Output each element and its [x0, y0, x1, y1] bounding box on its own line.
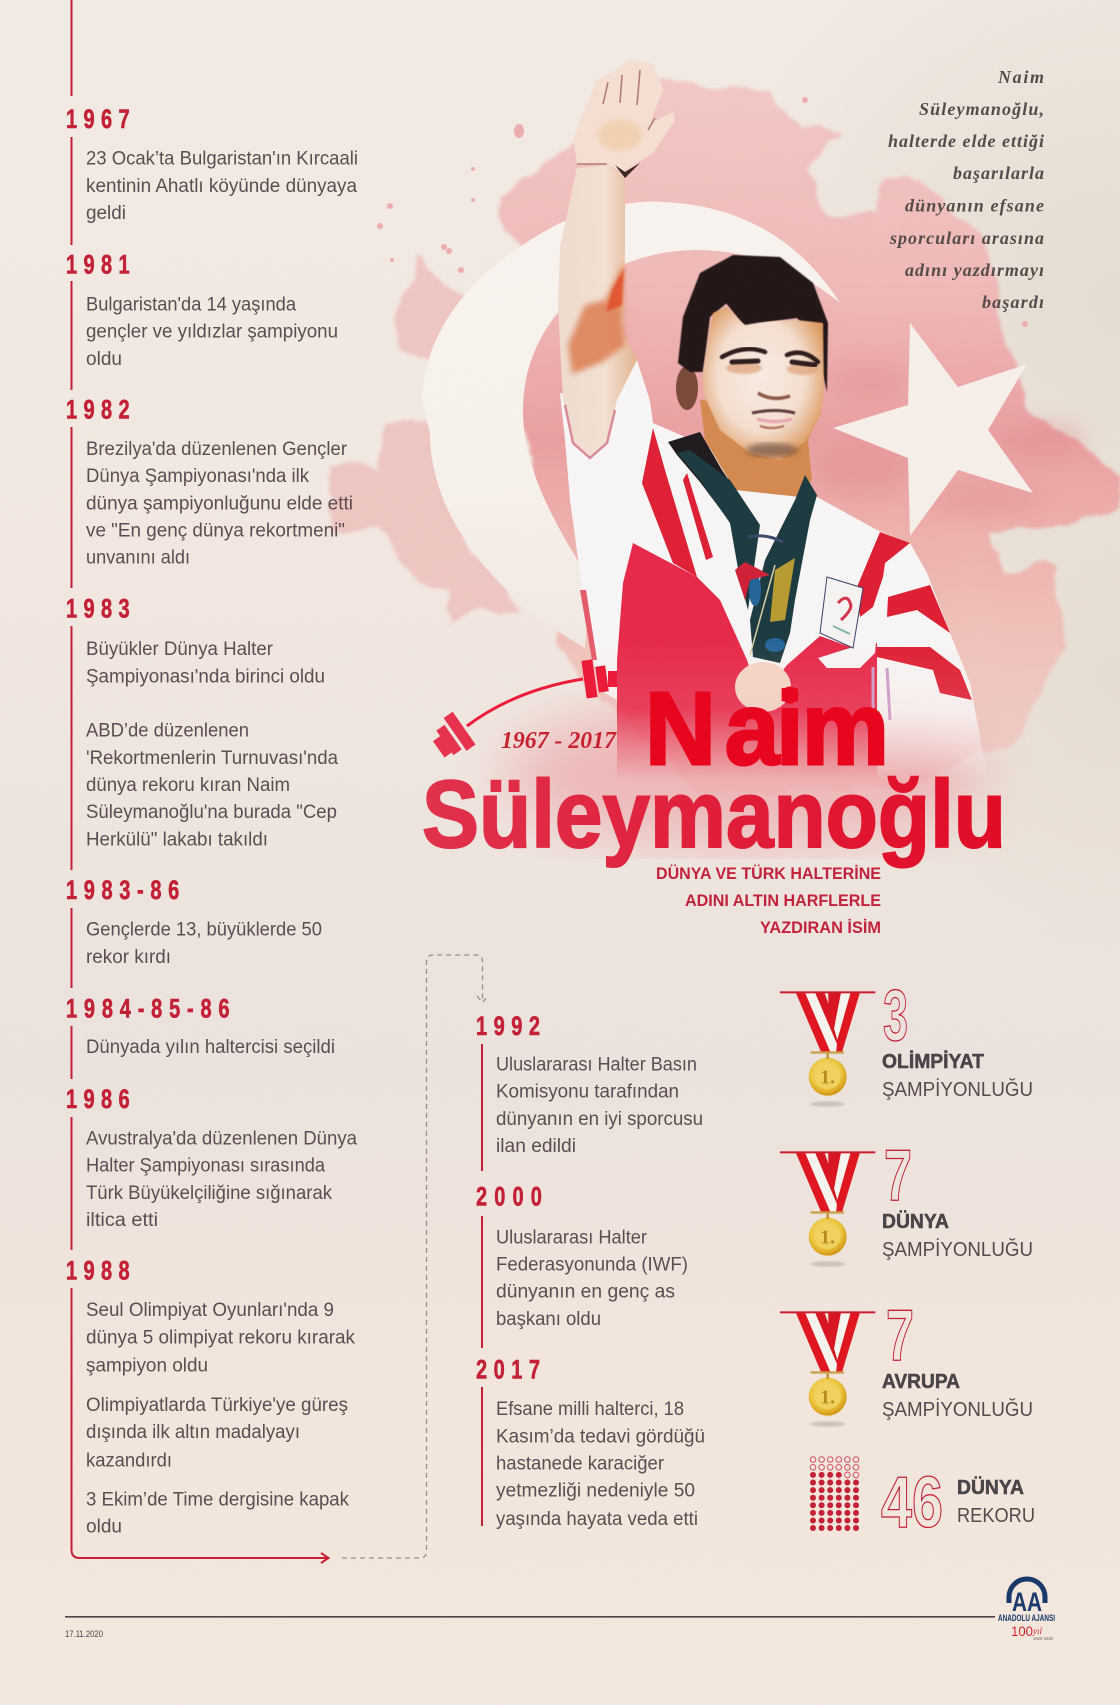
icon: medal: [780, 1151, 875, 1267]
entry: 1988: dışında ilk altın madalyayı: [86, 1422, 300, 1443]
sash stripes: [642, 428, 713, 577]
subtitle: ADINI ALTIN HARFLERLE: [685, 891, 881, 910]
entry: 1983: dünya rekoru kıran Naim: [86, 775, 290, 796]
entry: 1983-86: Gençlerde 13, büyüklerde 50: [86, 920, 322, 941]
entry: 1984-85-86: Dünyada yılın haltercisi seçildi: [86, 1037, 335, 1058]
entry: 1983: Büyükler Dünya Halter: [86, 639, 274, 660]
title: Süleymanoğlu: Süleymanoğlu: [422, 761, 1006, 868]
medal: [735, 662, 791, 712]
entry: 2017: Kasım’da tedavi gördüğü: [496, 1426, 705, 1447]
entry: 2000: Federasyonunda (IWF): [496, 1255, 688, 1276]
entry: 2017: yetmezliği nedeniyle 50: [496, 1481, 695, 1502]
stat: olympic: [780, 976, 1033, 1107]
entry: 1981: 1981: [66, 250, 130, 280]
icon: medal: 1.: [820, 1387, 835, 1409]
stat: world records: REKORU: [957, 1505, 1035, 1527]
entry: 1986: 1986: [66, 1084, 130, 1115]
entry: 1986: iltica etti: [86, 1210, 158, 1231]
subtitle: [656, 864, 881, 937]
entry: 1982: Brezilya'da düzenlenen Gençler: [86, 439, 348, 460]
entry: 1988: kazandırdı: [86, 1450, 172, 1471]
entry: 2000: [476, 1182, 688, 1348]
logo: Anadolu Ajansı: 100: [1011, 1623, 1033, 1639]
splatter: [377, 97, 1028, 327]
stat: world records: 46: [881, 1463, 943, 1543]
entry: 1982: Dünya Şampiyonası'nda ilk: [86, 466, 309, 487]
entry: 1992: [476, 1011, 703, 1171]
palm colour: [598, 119, 642, 151]
medal ribbon: [677, 450, 817, 663]
entry: 1988: şampiyon oldu: [86, 1356, 208, 1377]
thin left stripe: [580, 590, 597, 660]
crescent: [422, 202, 840, 648]
quote: başardı: [982, 292, 1044, 312]
entry: 1986: [66, 1084, 357, 1250]
eyes and brows: [722, 349, 818, 365]
stat: world records: [810, 1457, 1035, 1543]
entry: 1988: dünya 5 olimpiyat rekoru kırarak: [86, 1327, 355, 1348]
stat: olympic: 3: [883, 976, 908, 1056]
entry: 2017: [476, 1355, 705, 1530]
hair: [678, 255, 828, 392]
eye sockets: [726, 362, 819, 375]
timeline: left column: [66, 0, 358, 1563]
entry: 1983-86: 1983-86: [66, 875, 179, 906]
shirt: [560, 340, 990, 790]
entry: 1967: 1967: [66, 104, 130, 135]
star: [833, 323, 1033, 536]
darker flag ripple: [810, 362, 1085, 514]
entry: 1967: geldi: [86, 203, 126, 224]
stat: world records: DÜNYA: [957, 1476, 1024, 1499]
entry: 2017: hastanede karaciğer: [496, 1454, 665, 1475]
nose and mouth: [752, 393, 795, 428]
left wash blots: [330, 263, 520, 622]
entry: 1988: oldu: [86, 1517, 122, 1538]
quote: dünyanın efsane: [905, 196, 1044, 216]
footer rule: [65, 1616, 995, 1618]
stat: european championship: 7: [886, 1296, 914, 1376]
entry: 1967: 23 Ocak’ta Bulgaristan'ın Kırcaali: [86, 149, 358, 170]
red chest panel: [617, 543, 877, 790]
entry: 1981: Bulgaristan'da 14 yaşında: [86, 294, 296, 315]
stat: european championship: AVRUPA: [882, 1371, 960, 1393]
entry: 1967: [66, 104, 358, 245]
hand: [573, 60, 675, 172]
quote: halterde elde ettiği: [888, 131, 1044, 151]
entry: 1981: [66, 250, 338, 390]
entry: 1992: Uluslararası Halter Basın: [496, 1054, 697, 1076]
arrow: timeline continues: [72, 1288, 328, 1563]
stat: world championship: ŞAMPİYONLUĞU: [882, 1238, 1033, 1261]
entry: 1982: 1982: [66, 395, 130, 425]
entry: 1982: unvanını aldı: [86, 548, 190, 569]
athlete portrait: [558, 60, 990, 790]
quote: adını yazdırmayı: [905, 260, 1044, 280]
quote: [888, 67, 1044, 312]
title: Naim: Naim: [645, 672, 889, 787]
shirt logo: [748, 536, 783, 542]
face: [703, 307, 824, 460]
stats panel: [780, 976, 1035, 1543]
pink glow behind name: [505, 705, 985, 845]
entry: 1983: ABD’de düzenlenen: [86, 721, 249, 742]
quote: başarılarla: [953, 163, 1044, 183]
quote: Süleymanoğlu,: [919, 99, 1044, 119]
entry: 1983: [66, 594, 338, 870]
entry: 2000: 2000: [476, 1182, 542, 1212]
subtitle: DÜNYA VE TÜRK HALTERİNE: [656, 864, 881, 883]
icon: medal: [780, 1311, 875, 1427]
entry: 1988: Olimpiyatlarda Türkiye'ye güreş: [86, 1395, 348, 1416]
date: 17.11.2020: [65, 1629, 103, 1640]
stat: european championship: ŞAMPİYONLUĞU: [882, 1398, 1033, 1421]
finger lines: [577, 70, 655, 164]
hair fringe: [725, 290, 815, 325]
entry: 1967: kentinin Ahatlı köyünde dünyaya: [86, 176, 357, 197]
entry: 1992: ilan edildi: [496, 1136, 576, 1157]
arm red patch: [606, 268, 624, 312]
entry: 1988: Seul Olimpiyat Oyunları'nda 9: [86, 1300, 334, 1321]
icon: medal: 1.: [820, 1067, 835, 1089]
top line: [70, 0, 72, 96]
entry: 1988: [66, 1256, 355, 1538]
elbow rim: [565, 405, 615, 458]
entry: 1983: Süleymanoğlu'na burada "Cep: [86, 802, 337, 823]
entry: 1992: Komisyonu tarafından: [496, 1082, 679, 1103]
entry: 2000: Uluslararası Halter: [496, 1227, 648, 1248]
entry: 1983: Herkülü" lakabı takıldı: [86, 829, 268, 850]
entry: 1988: 1988: [66, 1256, 130, 1286]
entry: 1992: 1992: [476, 1011, 540, 1042]
ribbon colours: [735, 558, 795, 655]
dates: 1967 - 2017: [501, 728, 617, 754]
dark collar shadow: [668, 432, 728, 514]
entry: 2017: 2017: [476, 1355, 540, 1385]
white hem stripes: [818, 643, 876, 668]
entry: 1984-85-86: [66, 994, 335, 1079]
stat: world championship: DÜNYA: [882, 1210, 949, 1233]
subtitle: YAZDIRAN İSİM: [760, 918, 881, 937]
entry: 1983-86: [66, 875, 322, 988]
icon: medal: 1.: [820, 1227, 835, 1249]
raised arm: [558, 165, 637, 458]
neck: [700, 400, 822, 497]
icon: barbell: [433, 659, 617, 757]
quote: Naim: [997, 67, 1044, 87]
entry: 2017: Efsane milli halterci, 18: [496, 1399, 684, 1420]
entry: 1992: dünyanın en iyi sporcusu: [496, 1109, 703, 1130]
wrist shadow: [615, 163, 640, 178]
accreditation badge: [820, 577, 863, 648]
icon: medal: [780, 991, 875, 1107]
timeline: middle column: [476, 1011, 705, 1530]
entry: 1986: Avustralya'da düzenlenen Dünya: [86, 1128, 357, 1149]
entry: 2000: dünyanın en genç as: [496, 1282, 675, 1303]
logo: Anadolu Ajansı: 1920-2020: [1033, 1636, 1053, 1641]
stat: olympic: ŞAMPİYONLUĞU: [882, 1078, 1033, 1101]
stat: european championship: [780, 1296, 1033, 1427]
arm colour patch: [568, 262, 625, 374]
entry: 1981: oldu: [86, 349, 122, 370]
logo: Anadolu Ajansı: [998, 1579, 1055, 1641]
entry: 1988: 3 Ekim’de Time dergisine kapak: [86, 1489, 349, 1510]
entry: 1982: [66, 395, 353, 588]
pink watercolor wash: [480, 75, 1120, 795]
dashed connector arrow: [342, 955, 488, 1558]
entry: 1981: gençler ve yıldızlar şampiyonu: [86, 322, 338, 343]
chin shadow: [746, 443, 798, 457]
entry: 1982: ve "En genç dünya rekortmeni": [86, 521, 345, 542]
entry: 2000: başkanı oldu: [496, 1309, 601, 1330]
entry: 1986: Halter Şampiyonası sırasında: [86, 1156, 325, 1177]
entry: 1983: 'Rekortmenlerin Turnuvası'nda: [86, 748, 338, 769]
quote: sporcuları arasına: [889, 228, 1044, 248]
entry: 2017: yaşında hayata veda etti: [496, 1509, 698, 1530]
stat: world championship: [780, 1136, 1033, 1267]
logo: Anadolu Ajansı: AA: [1012, 1587, 1042, 1617]
entry: 1983: 1983: [66, 594, 130, 624]
logo: Anadolu Ajansı: yıl: [1032, 1626, 1042, 1636]
entry: 1984-85-86: 1984-85-86: [66, 994, 230, 1024]
sleeve stripes: [857, 532, 972, 700]
Turkish flag watercolor: [330, 75, 1120, 795]
entry: 1982: dünya şampiyonluğunu elde etti: [86, 493, 353, 514]
logo: Anadolu Ajansı: ANADOLU AJANSI: [998, 1613, 1055, 1624]
ear: [676, 366, 698, 410]
entry: 1983-86: rekor kırdı: [86, 947, 171, 968]
sleeve fringe: [873, 667, 890, 720]
stat: world championship: 7: [884, 1136, 912, 1216]
stat: olympic: OLİMPİYAT: [882, 1050, 984, 1073]
icon: dot grid of 46 records: [810, 1457, 859, 1531]
entry: 1983: Şampiyonası'nda birinci oldu: [86, 666, 325, 687]
entry: 1986: Türk Büyükelçiliğine sığınarak: [86, 1183, 332, 1204]
